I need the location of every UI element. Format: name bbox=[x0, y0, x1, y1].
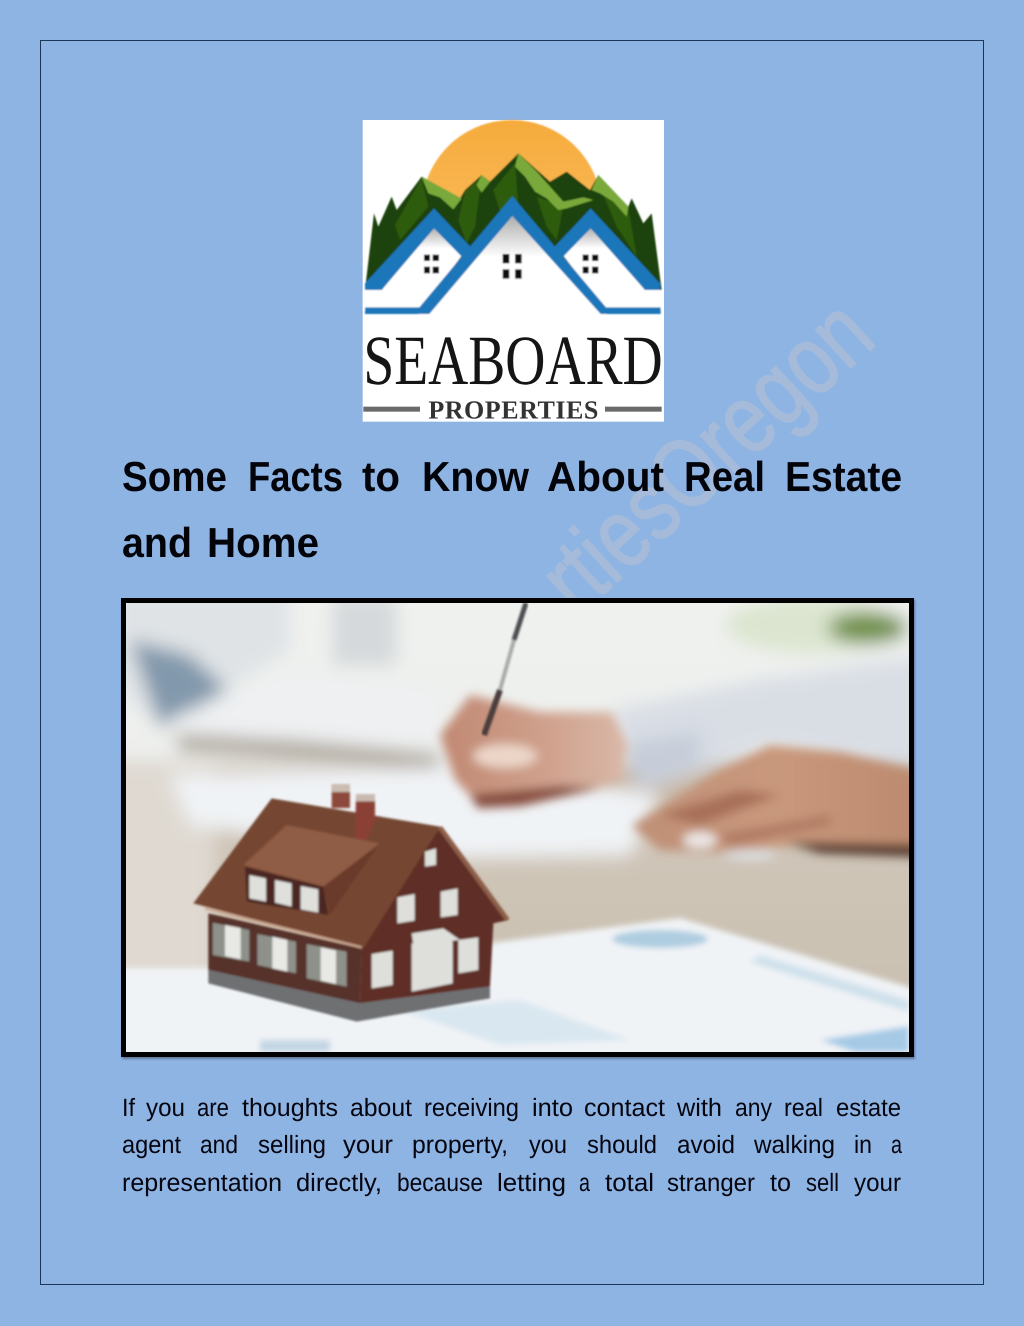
title bbox=[122, 453, 902, 566]
mountain mid tones bbox=[395, 163, 637, 257]
body line 3: sell bbox=[806, 1169, 839, 1197]
dormer bbox=[245, 867, 328, 915]
mountain highlights bbox=[422, 153, 628, 217]
body line 1 bbox=[122, 1094, 901, 1122]
laptop shadow bbox=[175, 735, 440, 768]
title: Know bbox=[422, 453, 529, 500]
body line 1: into bbox=[532, 1094, 573, 1122]
title: Facts bbox=[248, 453, 343, 500]
body line 2: in bbox=[854, 1131, 872, 1159]
eave trim bbox=[205, 908, 362, 947]
photo frame bbox=[121, 598, 914, 1057]
sun bbox=[422, 120, 602, 210]
logo subtitle: PROPERTIES bbox=[428, 395, 598, 424]
body line 3: to bbox=[770, 1169, 791, 1197]
title: and bbox=[122, 519, 192, 566]
photo: house model and hands signing contract bbox=[120, 598, 916, 1060]
body line 2: agent bbox=[122, 1131, 181, 1159]
logo wordmark: SEABOARD bbox=[363, 321, 663, 399]
window bbox=[332, 596, 397, 666]
body line 1: receiving bbox=[424, 1094, 519, 1122]
house model bbox=[193, 784, 508, 1022]
body line 2: selling bbox=[258, 1131, 326, 1159]
dormer windows bbox=[249, 875, 318, 913]
lower document bbox=[110, 918, 925, 1060]
body line 1: with bbox=[676, 1094, 722, 1122]
laptop base bbox=[173, 712, 180, 714]
body line 3: a bbox=[579, 1169, 590, 1197]
blue roof lines bbox=[365, 196, 661, 314]
body line 1: contact bbox=[584, 1094, 665, 1122]
gable windows and door bbox=[372, 848, 478, 992]
body line 3: your bbox=[854, 1169, 901, 1197]
logo: Seaboard Properties bbox=[363, 120, 664, 424]
body line 2: your bbox=[343, 1131, 393, 1159]
body line 2: and bbox=[200, 1131, 238, 1159]
title: to bbox=[362, 453, 400, 500]
roof shading bbox=[474, 216, 551, 257]
body paragraph bbox=[122, 1094, 902, 1197]
main roof bbox=[193, 798, 440, 948]
gable edge bbox=[440, 827, 508, 920]
sleeve bbox=[617, 656, 909, 786]
front windows bbox=[213, 923, 347, 987]
logo subtitle rules bbox=[363, 407, 662, 412]
title: Real bbox=[684, 453, 765, 500]
body line 3: representation bbox=[122, 1169, 282, 1197]
body line 1: are bbox=[197, 1094, 229, 1122]
body line 1: estate bbox=[836, 1094, 901, 1122]
table bbox=[206, 754, 909, 990]
body line 1: any bbox=[735, 1094, 772, 1122]
writing hand bbox=[440, 695, 628, 806]
logo artwork: sun, mountains and roofs bbox=[363, 120, 662, 315]
watermark: rtiesOregon bbox=[518, 277, 893, 633]
photo shadow bbox=[122, 600, 915, 1059]
body line 1: you bbox=[146, 1094, 185, 1122]
body line 3 bbox=[122, 1169, 901, 1197]
title: Home bbox=[207, 519, 319, 566]
logo background bbox=[363, 120, 664, 422]
body line 2: property, bbox=[412, 1131, 508, 1159]
body line 3: total bbox=[605, 1169, 654, 1197]
pen bbox=[484, 603, 526, 735]
laptop screen bbox=[130, 640, 228, 728]
body line 1: about bbox=[350, 1094, 412, 1122]
mountains bbox=[365, 153, 662, 290]
body line 2: walking bbox=[753, 1131, 835, 1159]
body line 2: a bbox=[891, 1131, 902, 1159]
chimneys bbox=[332, 784, 350, 808]
greenery bbox=[724, 603, 877, 658]
body line 1: real bbox=[784, 1094, 823, 1122]
body line 3: letting bbox=[497, 1169, 566, 1197]
windows bbox=[424, 254, 598, 279]
middle paper bbox=[170, 765, 660, 858]
title: Estate bbox=[785, 453, 902, 500]
body line 2: should bbox=[587, 1131, 657, 1159]
body line 2: you bbox=[529, 1131, 567, 1159]
blurred office background bbox=[126, 603, 909, 992]
body line 2 bbox=[122, 1131, 902, 1159]
gable wall bbox=[360, 827, 508, 1003]
title: About bbox=[547, 453, 664, 500]
blurred hands bbox=[440, 695, 925, 860]
foundation bbox=[208, 970, 490, 1022]
right hand bbox=[632, 745, 925, 852]
laptop lid bbox=[126, 603, 289, 706]
front wall bbox=[208, 913, 362, 1003]
body line 3: directly, bbox=[296, 1169, 382, 1197]
house interiors bbox=[363, 225, 463, 310]
title: Some bbox=[122, 453, 227, 500]
body line 3: stranger bbox=[667, 1169, 755, 1197]
body line 3: because bbox=[397, 1169, 483, 1197]
body line 1: thoughts bbox=[242, 1094, 338, 1122]
body line 1: If bbox=[122, 1094, 135, 1122]
body line 2: avoid bbox=[677, 1131, 735, 1159]
